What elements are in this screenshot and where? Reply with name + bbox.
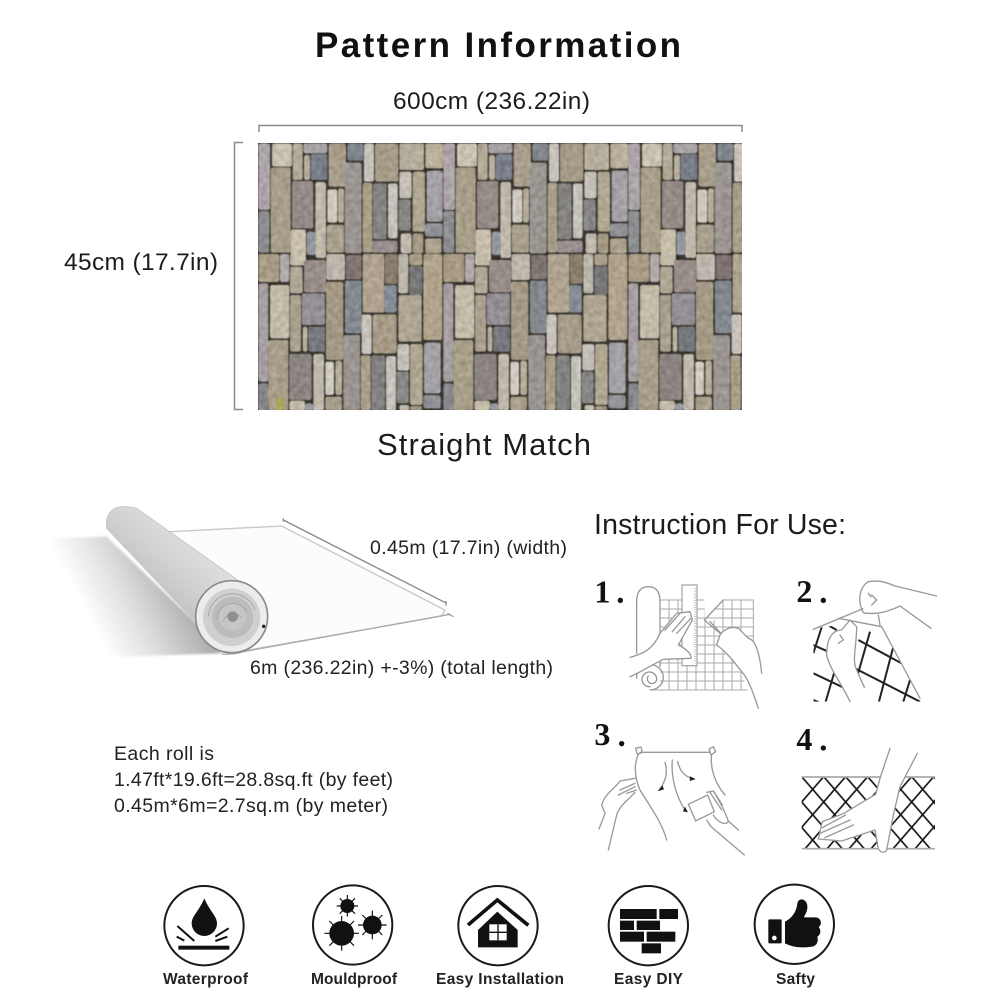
height label: 45cm (17.7in)	[64, 249, 218, 276]
roll coverage text: Each roll is	[114, 743, 214, 765]
width label: 600cm (236.22in)	[393, 88, 590, 115]
pattern match caption: Straight Match	[377, 427, 591, 462]
label: safety: Safty	[776, 971, 815, 988]
icon: mouldproof	[313, 885, 392, 965]
step 2: peel backing: 2	[796, 573, 812, 609]
roll coverage text	[114, 743, 393, 817]
roll coverage text: 0.45m*6m=2.7sq.m (by meter)	[114, 795, 388, 817]
icon: easy installation	[458, 886, 538, 965]
icon: easy diy	[609, 886, 688, 965]
label: easy installation: Easy Installation	[436, 971, 564, 988]
stone wallpaper pattern	[258, 143, 742, 410]
icon: safety thumbs up	[755, 885, 834, 964]
instructions heading: Instruction For Use:	[594, 509, 846, 541]
step 3: apply and smooth	[594, 716, 744, 855]
label: easy diy: Easy DIY	[614, 971, 684, 988]
title: Pattern Information	[315, 26, 681, 65]
step 2: peel backing	[796, 573, 937, 702]
icon: waterproof	[164, 886, 244, 965]
label: mouldproof: Mouldproof	[311, 971, 398, 988]
roll width label: 0.45m (17.7in) (width)	[370, 537, 567, 559]
wallpaper roll illustration	[47, 507, 453, 657]
roll length label: 6m (236.22in) +-3%) (total length)	[250, 657, 553, 679]
height bracket	[234, 142, 243, 410]
width bracket	[259, 126, 742, 132]
step 4: press onto wall	[796, 721, 935, 852]
step 1: measure and cut	[594, 574, 762, 708]
label: waterproof: Waterproof	[163, 971, 249, 988]
roll coverage text: 1.47ft*19.6ft=28.8sq.ft (by feet)	[114, 769, 393, 791]
step 4: press onto wall: 4	[796, 721, 812, 757]
step 3: apply and smooth: 3	[594, 716, 610, 752]
step 1: measure and cut: 1	[594, 574, 610, 610]
